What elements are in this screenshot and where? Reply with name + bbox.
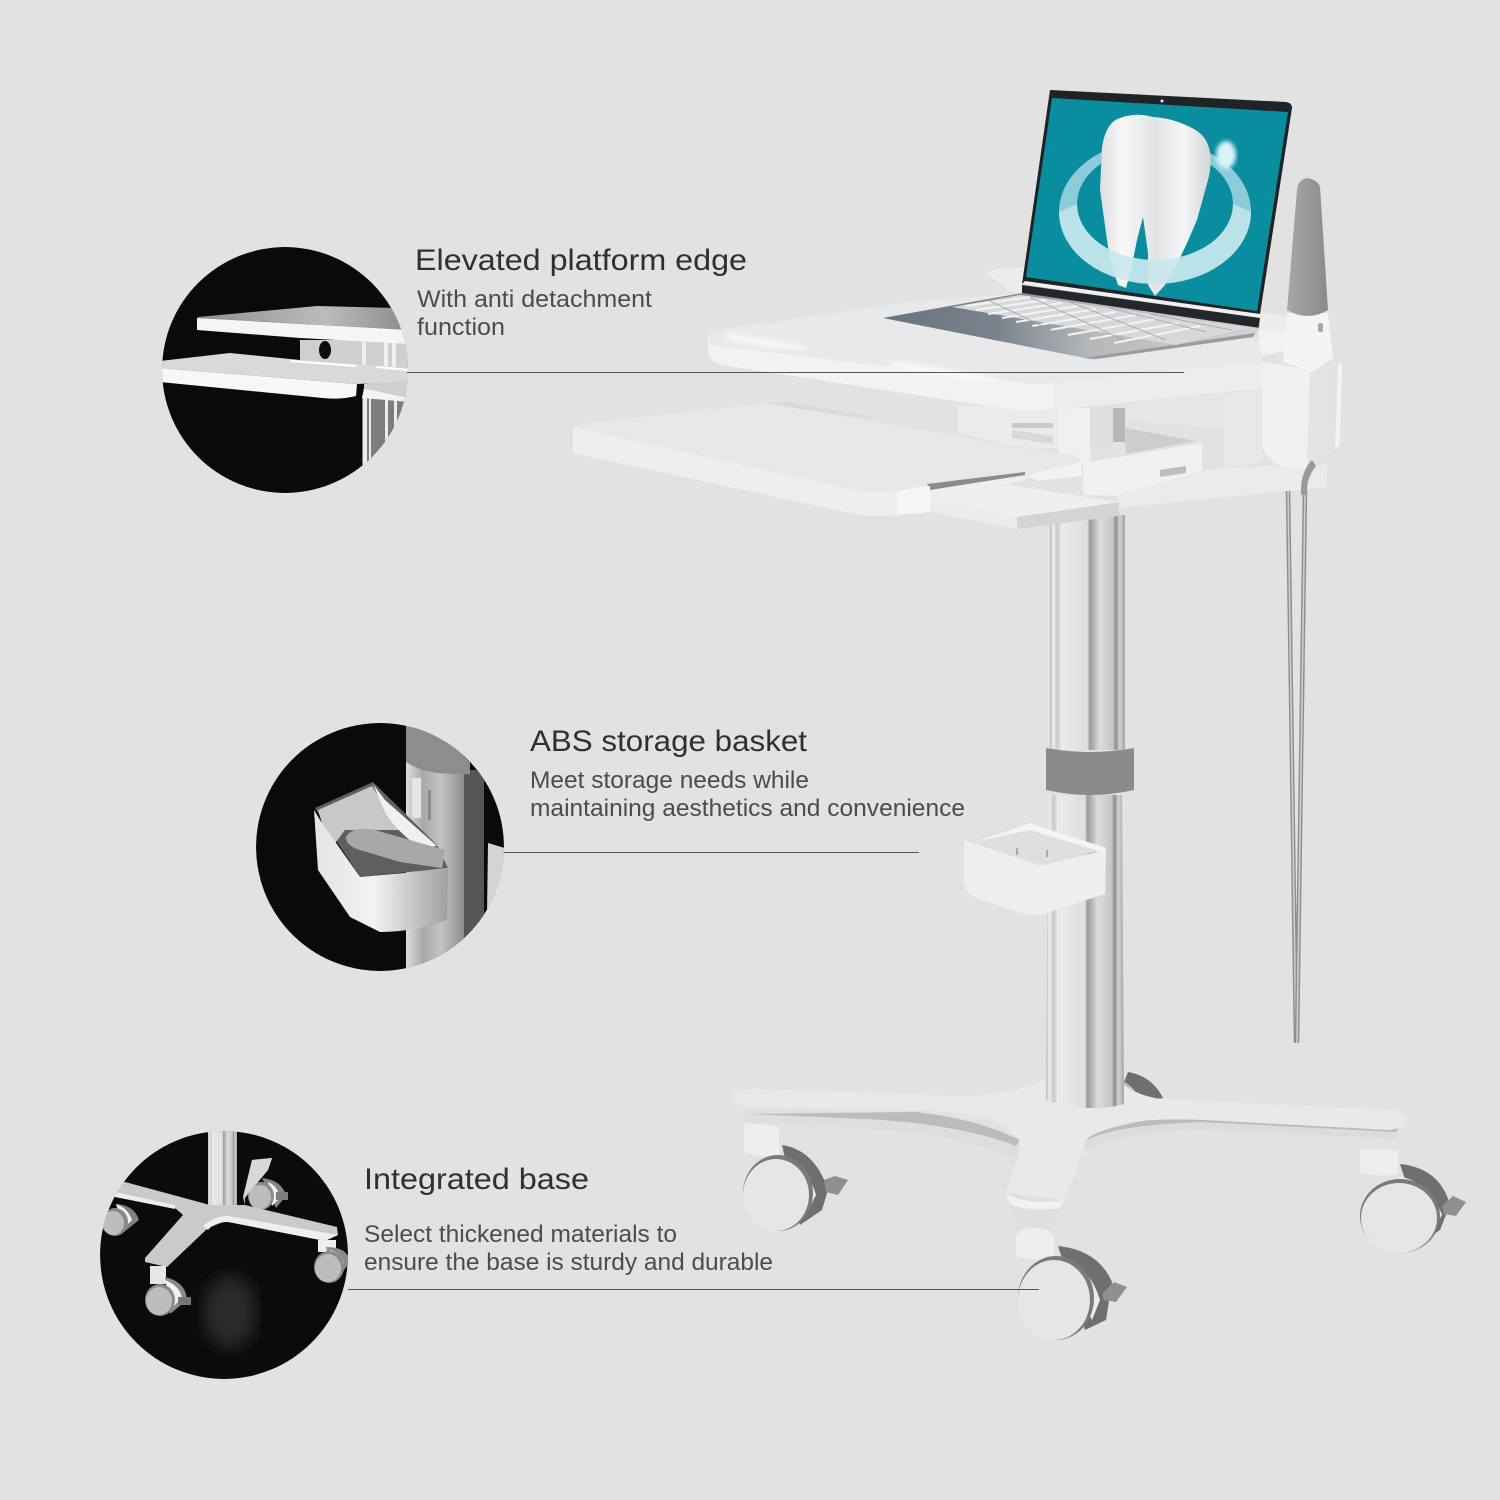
- tooth ring back: [1059, 140, 1251, 284]
- tooth ring front: [1059, 204, 1251, 284]
- right caster in detail: [314, 1240, 350, 1283]
- lower base of shelf structure: [958, 386, 1327, 508]
- shelf underside window: [1125, 392, 1224, 428]
- height collar: [1046, 748, 1134, 795]
- laptop screen: [1026, 98, 1288, 311]
- webcam: [1160, 100, 1164, 102]
- left caster in detail: [102, 1204, 139, 1236]
- slide-out mouse tray: [930, 485, 1119, 529]
- floor glow: [204, 1276, 256, 1348]
- laptop hinge: [1022, 284, 1260, 328]
- leader lines: [348, 372, 1184, 1290]
- callout: integrated base: Select thickened materials to: [364, 1221, 677, 1248]
- rear caster in detail: [248, 1178, 288, 1210]
- aluminium column lower: [1046, 795, 1124, 1108]
- callout: ABS storage basket: maintaining aesthetics and convenience: [530, 795, 965, 822]
- scanner cable rods: [1288, 488, 1305, 1043]
- callout: integrated base: [364, 1163, 773, 1276]
- detail circle: elevated platform edge: [160, 247, 410, 493]
- upper plate in detail: [198, 306, 410, 330]
- infographic canvas: [100, 90, 1466, 1379]
- laptop lid: [1022, 90, 1292, 314]
- left caster: [743, 1123, 848, 1231]
- detail circle: integrated base: [100, 1125, 350, 1379]
- laptop deck: [883, 293, 1260, 359]
- lower keyboard tray: [573, 402, 1082, 516]
- lower plate in detail: [160, 353, 410, 384]
- detail circle: ABS storage basket: [256, 723, 505, 975]
- front caster: [1016, 1234, 1127, 1340]
- panel: cart product illustration: [573, 90, 1466, 1340]
- callout: ABS storage basket: Meet storage needs while: [530, 767, 809, 794]
- intraoral scanner: [1283, 178, 1333, 495]
- sparkle: [1216, 141, 1236, 169]
- callout: integrated base: ensure the base is sturdy and durable: [364, 1249, 773, 1276]
- callout: elevated platform edge: function: [417, 314, 505, 341]
- star base in detail: [100, 1158, 338, 1267]
- callout: ABS storage basket: ABS storage basket: [530, 725, 808, 758]
- rear caster behind column: [1124, 1072, 1163, 1104]
- laptop: [883, 90, 1292, 359]
- callout: elevated platform edge: Elevated platform edge: [415, 244, 747, 277]
- basket wall: [314, 810, 448, 932]
- callout: elevated platform edge: With anti detachment: [417, 286, 652, 313]
- mid block in detail: [300, 340, 410, 376]
- keyboard: [952, 295, 1247, 345]
- aluminium column upper: [1050, 515, 1125, 750]
- front caster in detail: [145, 1266, 191, 1316]
- tooth illustration: [1100, 115, 1211, 296]
- column in detail: [406, 725, 464, 975]
- callout: integrated base: Integrated base: [364, 1163, 589, 1196]
- intraoral scanner holder: [1262, 357, 1345, 470]
- handpiece in basket: [346, 829, 445, 868]
- callout: ABS storage basket: [530, 725, 965, 822]
- basket interior: [315, 782, 448, 877]
- storage basket: [964, 823, 1106, 915]
- upper platform with elevated edge: [708, 268, 1288, 410]
- column in detail: [208, 1131, 237, 1205]
- callout: elevated platform edge: [415, 244, 747, 341]
- right caster: [1360, 1150, 1466, 1253]
- base: five-point star arms: [732, 1078, 1408, 1238]
- column in detail: [362, 396, 406, 466]
